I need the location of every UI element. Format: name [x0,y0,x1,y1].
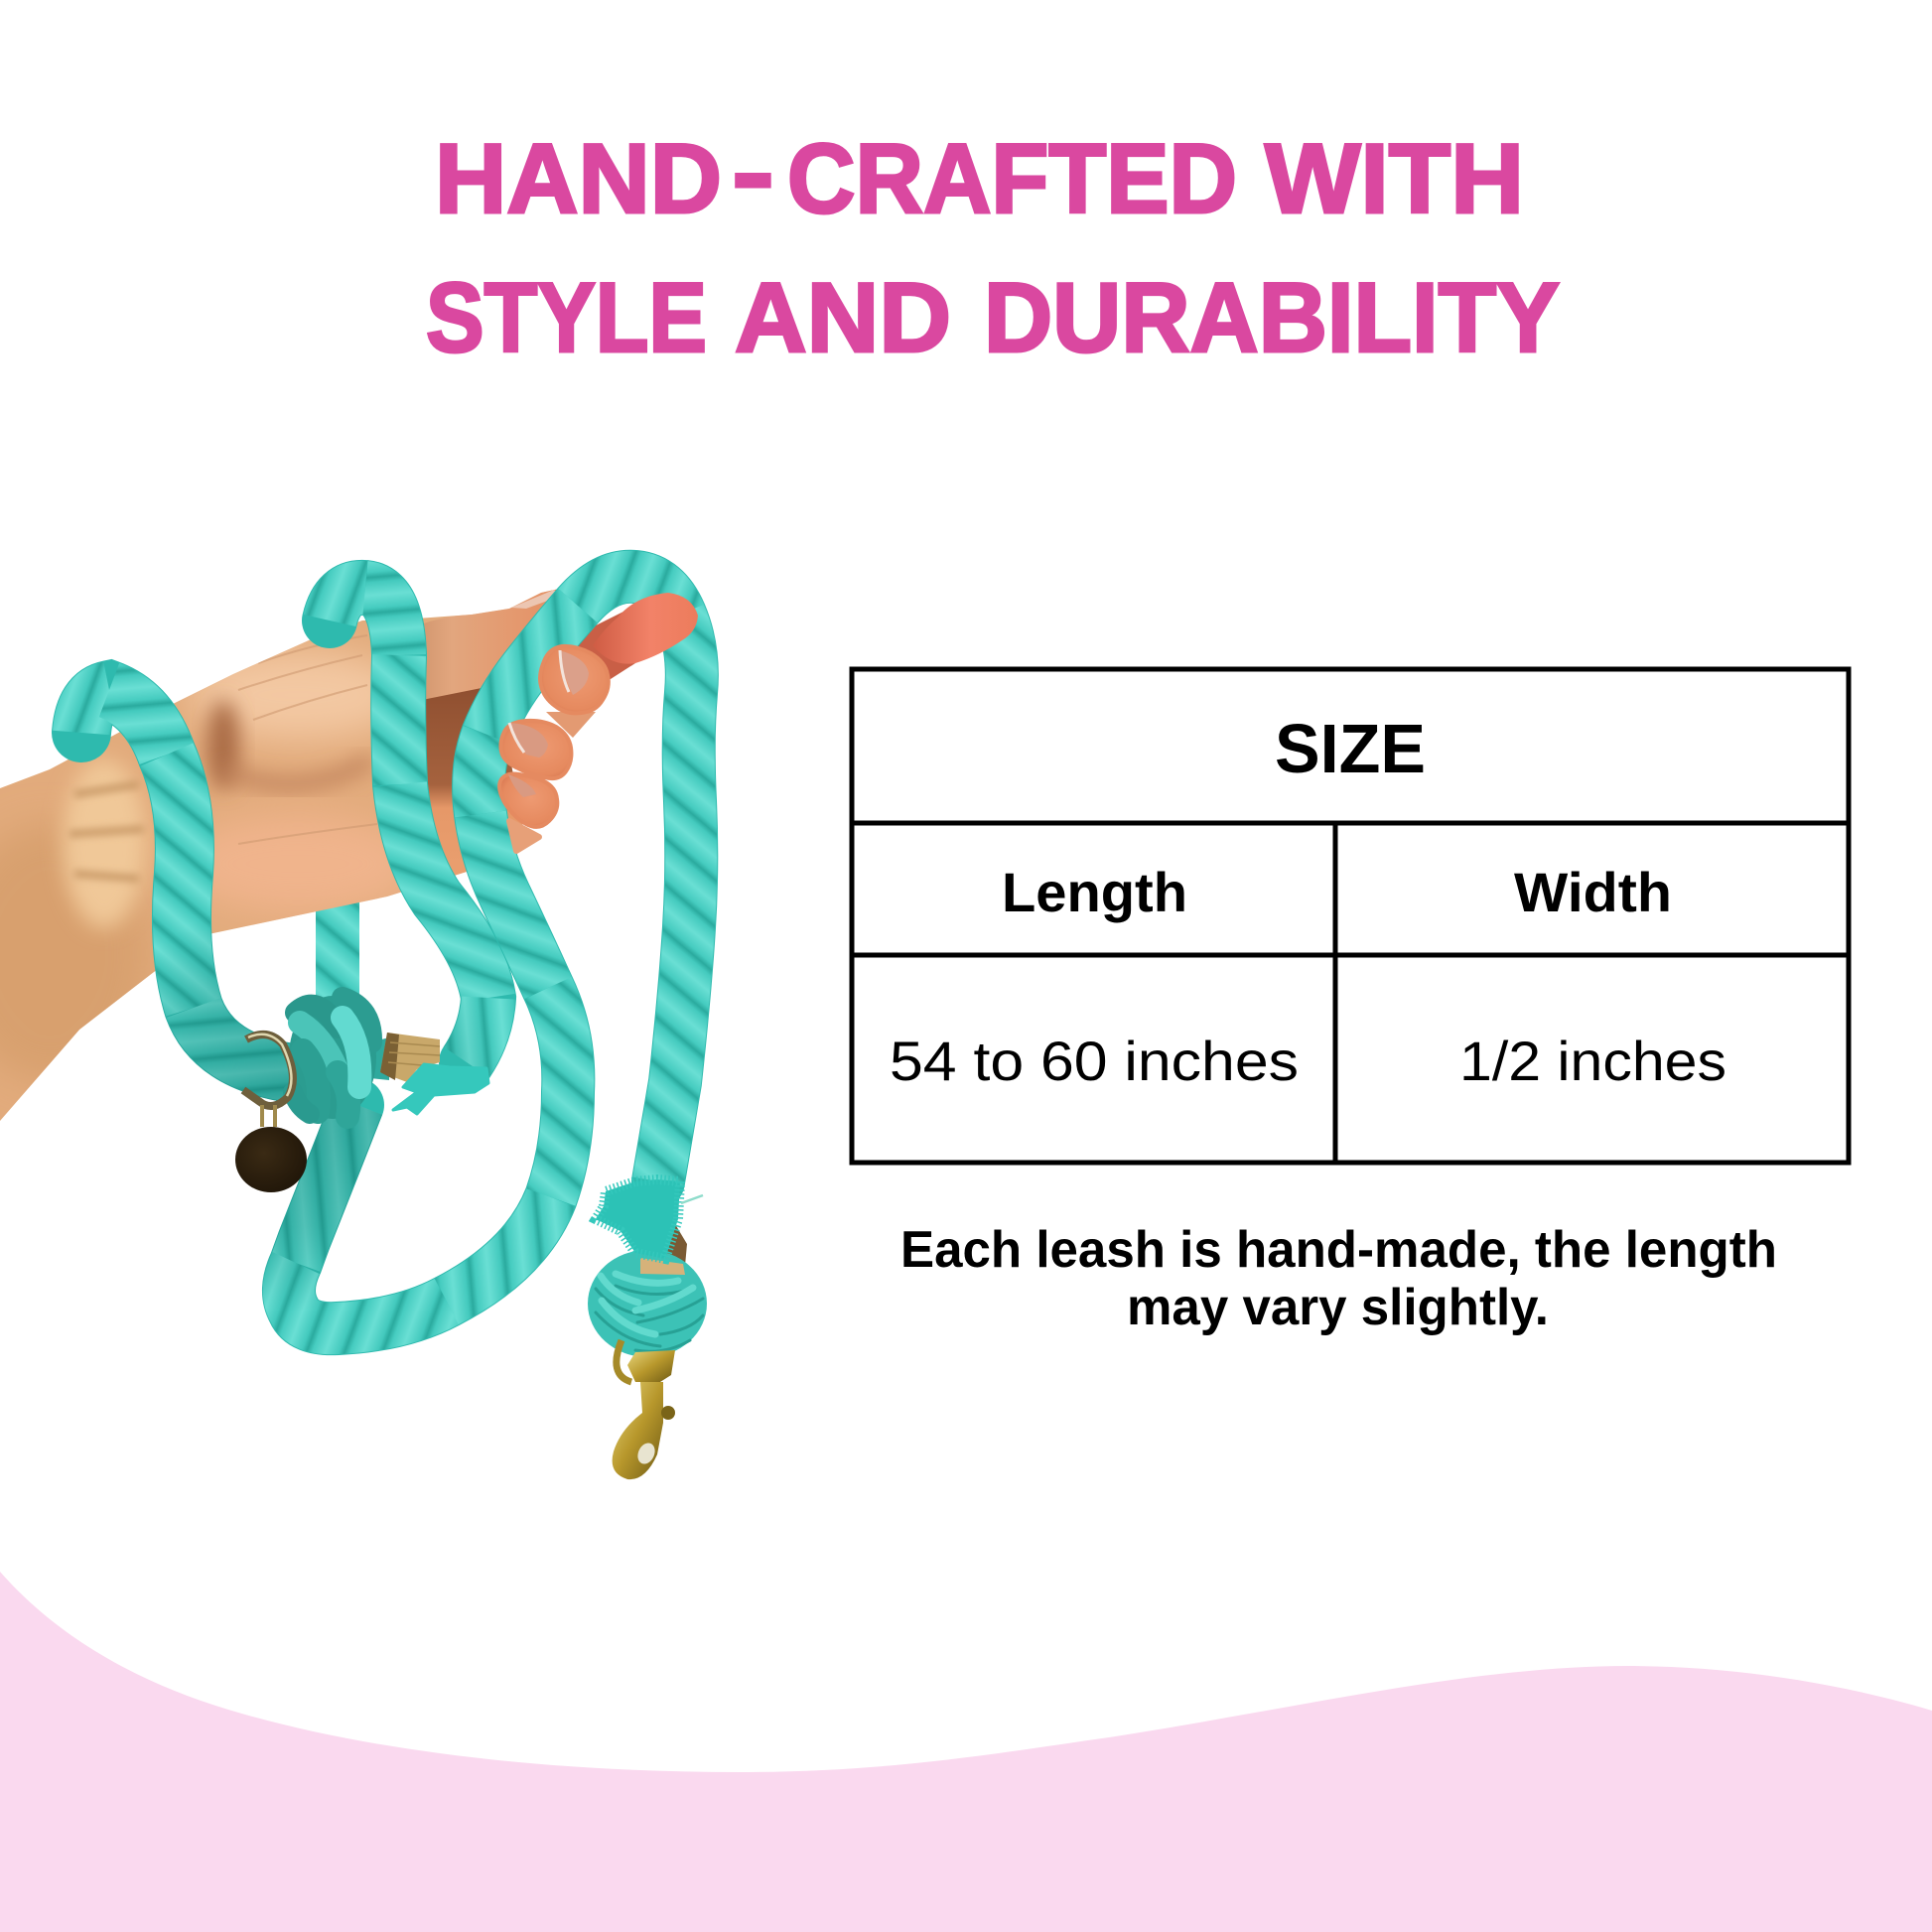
table heading: size: SIZE [1275,710,1426,787]
width value: 1/2 inches [1459,1030,1726,1092]
note about length: Each leash is hand-made, the length [900,1221,1777,1279]
index finger base behind rope [556,606,635,695]
metal ring and round tag [235,1035,307,1192]
rope end knot, wrap and tuft [588,1179,707,1357]
note about length: may vary slightly. [1127,1279,1549,1336]
note about length [900,1221,1777,1336]
finger three [499,774,557,851]
title: STYLE [426,262,707,372]
title: WITH [1265,123,1524,233]
column heading: width: Width [1514,861,1672,923]
rope collar knot, wrap and tuft [289,996,488,1119]
brass snap hook [613,1340,675,1479]
fingers [499,593,698,851]
title [426,114,1560,372]
photo: hand holding teal rope leash [0,576,707,1479]
rope strand behind the palm [316,894,359,1010]
rope strands [81,577,692,1328]
length value: 54 to 60 inches [890,1030,1299,1092]
title: HAND [435,123,722,233]
wave background [0,1572,1932,1932]
title: CRAFTED [787,123,1237,233]
title: AND [735,262,951,372]
column heading: length: Length [1002,861,1187,923]
hand and forearm [0,590,556,1121]
title: DURABILITY [984,262,1560,372]
size table [852,669,1849,1163]
rope loop over palm [330,588,488,1062]
rope loop around wrist [81,690,293,1073]
finger two [500,721,571,778]
index fingertip [593,593,698,664]
finger one [540,646,609,738]
title: - [732,114,774,230]
long rope to snap hook [289,577,692,1328]
